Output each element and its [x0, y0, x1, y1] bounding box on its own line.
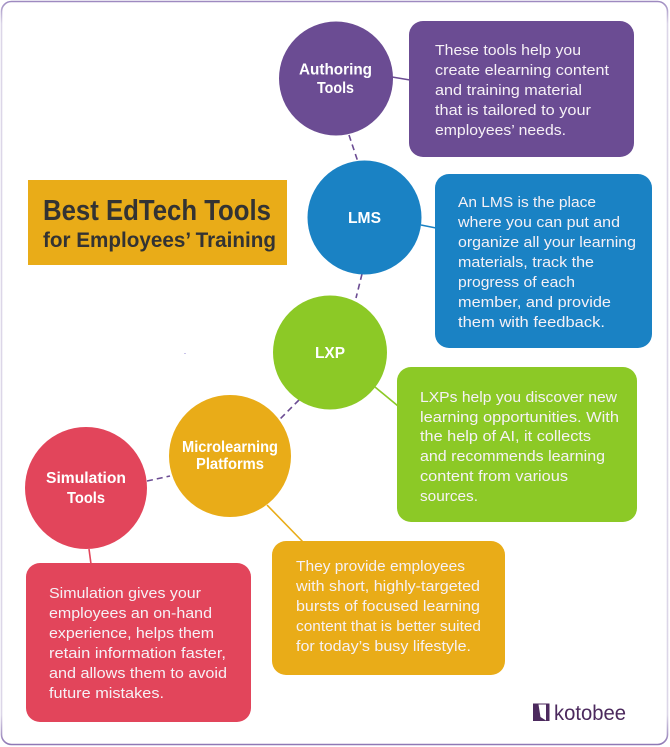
panel: LXP description: sources.	[420, 488, 478, 505]
panel: Simulation description: future mistakes.	[49, 685, 164, 702]
circle: LXP	[273, 296, 387, 410]
circle: LMS: LMS	[348, 210, 381, 227]
circle: Simulation Tools: Tools	[67, 490, 105, 507]
panel: Authoring Tools description	[409, 21, 634, 157]
panel: Authoring Tools description: employees’ needs.	[435, 122, 566, 139]
panel: Simulation description: and allows them to avoid	[49, 665, 227, 682]
circle: LMS	[308, 160, 422, 274]
circle: Authoring Tools: Tools	[317, 80, 354, 97]
panel: LMS description: An LMS is the place	[458, 194, 596, 211]
panel: LMS description	[435, 174, 652, 348]
panel: LMS description: progress of each	[458, 274, 575, 291]
title banner: Best EdTech Tools	[43, 195, 271, 227]
panel: Authoring Tools description: create elearning content	[435, 62, 610, 79]
panel: LMS description: where you can put and	[457, 214, 620, 231]
circle: Simulation Tools: Simulation	[46, 470, 126, 487]
panel: LXP description: learning opportunities. With	[420, 409, 619, 426]
circle: LXP: LXP	[315, 345, 345, 362]
circle: Microlearning Platforms	[169, 395, 291, 517]
panel: Microlearning description: with short, highly-targeted	[295, 578, 480, 595]
panel: Microlearning description: bursts of focused learning	[296, 598, 480, 615]
circle: Microlearning Platforms: Platforms	[196, 456, 264, 473]
circle: Authoring Tools	[279, 22, 393, 136]
panel: LMS description: member, and provide	[458, 294, 611, 311]
panel: Microlearning description: content that is better suited	[296, 618, 481, 635]
panel: Authoring Tools description: These tools help you	[435, 42, 581, 59]
panel: LMS description: organize all your learning	[458, 234, 636, 251]
panel: Simulation description: employees an on-hand	[49, 605, 212, 622]
panel: LMS description: them with feedback.	[458, 314, 605, 331]
panel: Simulation description	[26, 563, 251, 722]
panel: Simulation description: Simulation gives your	[49, 585, 201, 602]
panel: Microlearning description: for today’s busy lifestyle.	[296, 638, 471, 655]
connectors between circles and panels	[89, 77, 436, 564]
panel: Microlearning description	[272, 541, 505, 675]
panel: LXP description	[397, 367, 637, 522]
panel: LXP description: LXPs help you discover new	[420, 389, 617, 406]
panel: Simulation description: experience, helps them	[49, 625, 214, 642]
title banner: for Employees’ Training	[43, 229, 276, 252]
panel: Authoring Tools description: and training material	[435, 82, 582, 99]
logo: kotobee: kotobee	[554, 702, 626, 725]
panel: Microlearning description: They provide employees	[296, 558, 465, 575]
panel: Authoring Tools description: that is tailored to your	[435, 102, 591, 119]
panel: LXP description: and recommends learning	[420, 448, 605, 465]
panel: LXP description: content from various	[420, 468, 568, 485]
panel: LXP description: the help of AI, it collects	[420, 428, 591, 445]
panel: Simulation description: retain information faster,	[49, 645, 226, 662]
panel: LMS description: materials, track the	[458, 254, 594, 271]
circle: Authoring Tools: Authoring	[299, 62, 372, 78]
circle: Simulation Tools	[25, 427, 147, 549]
title banner	[28, 180, 287, 265]
circle: Microlearning Platforms: Microlearning	[182, 439, 278, 456]
